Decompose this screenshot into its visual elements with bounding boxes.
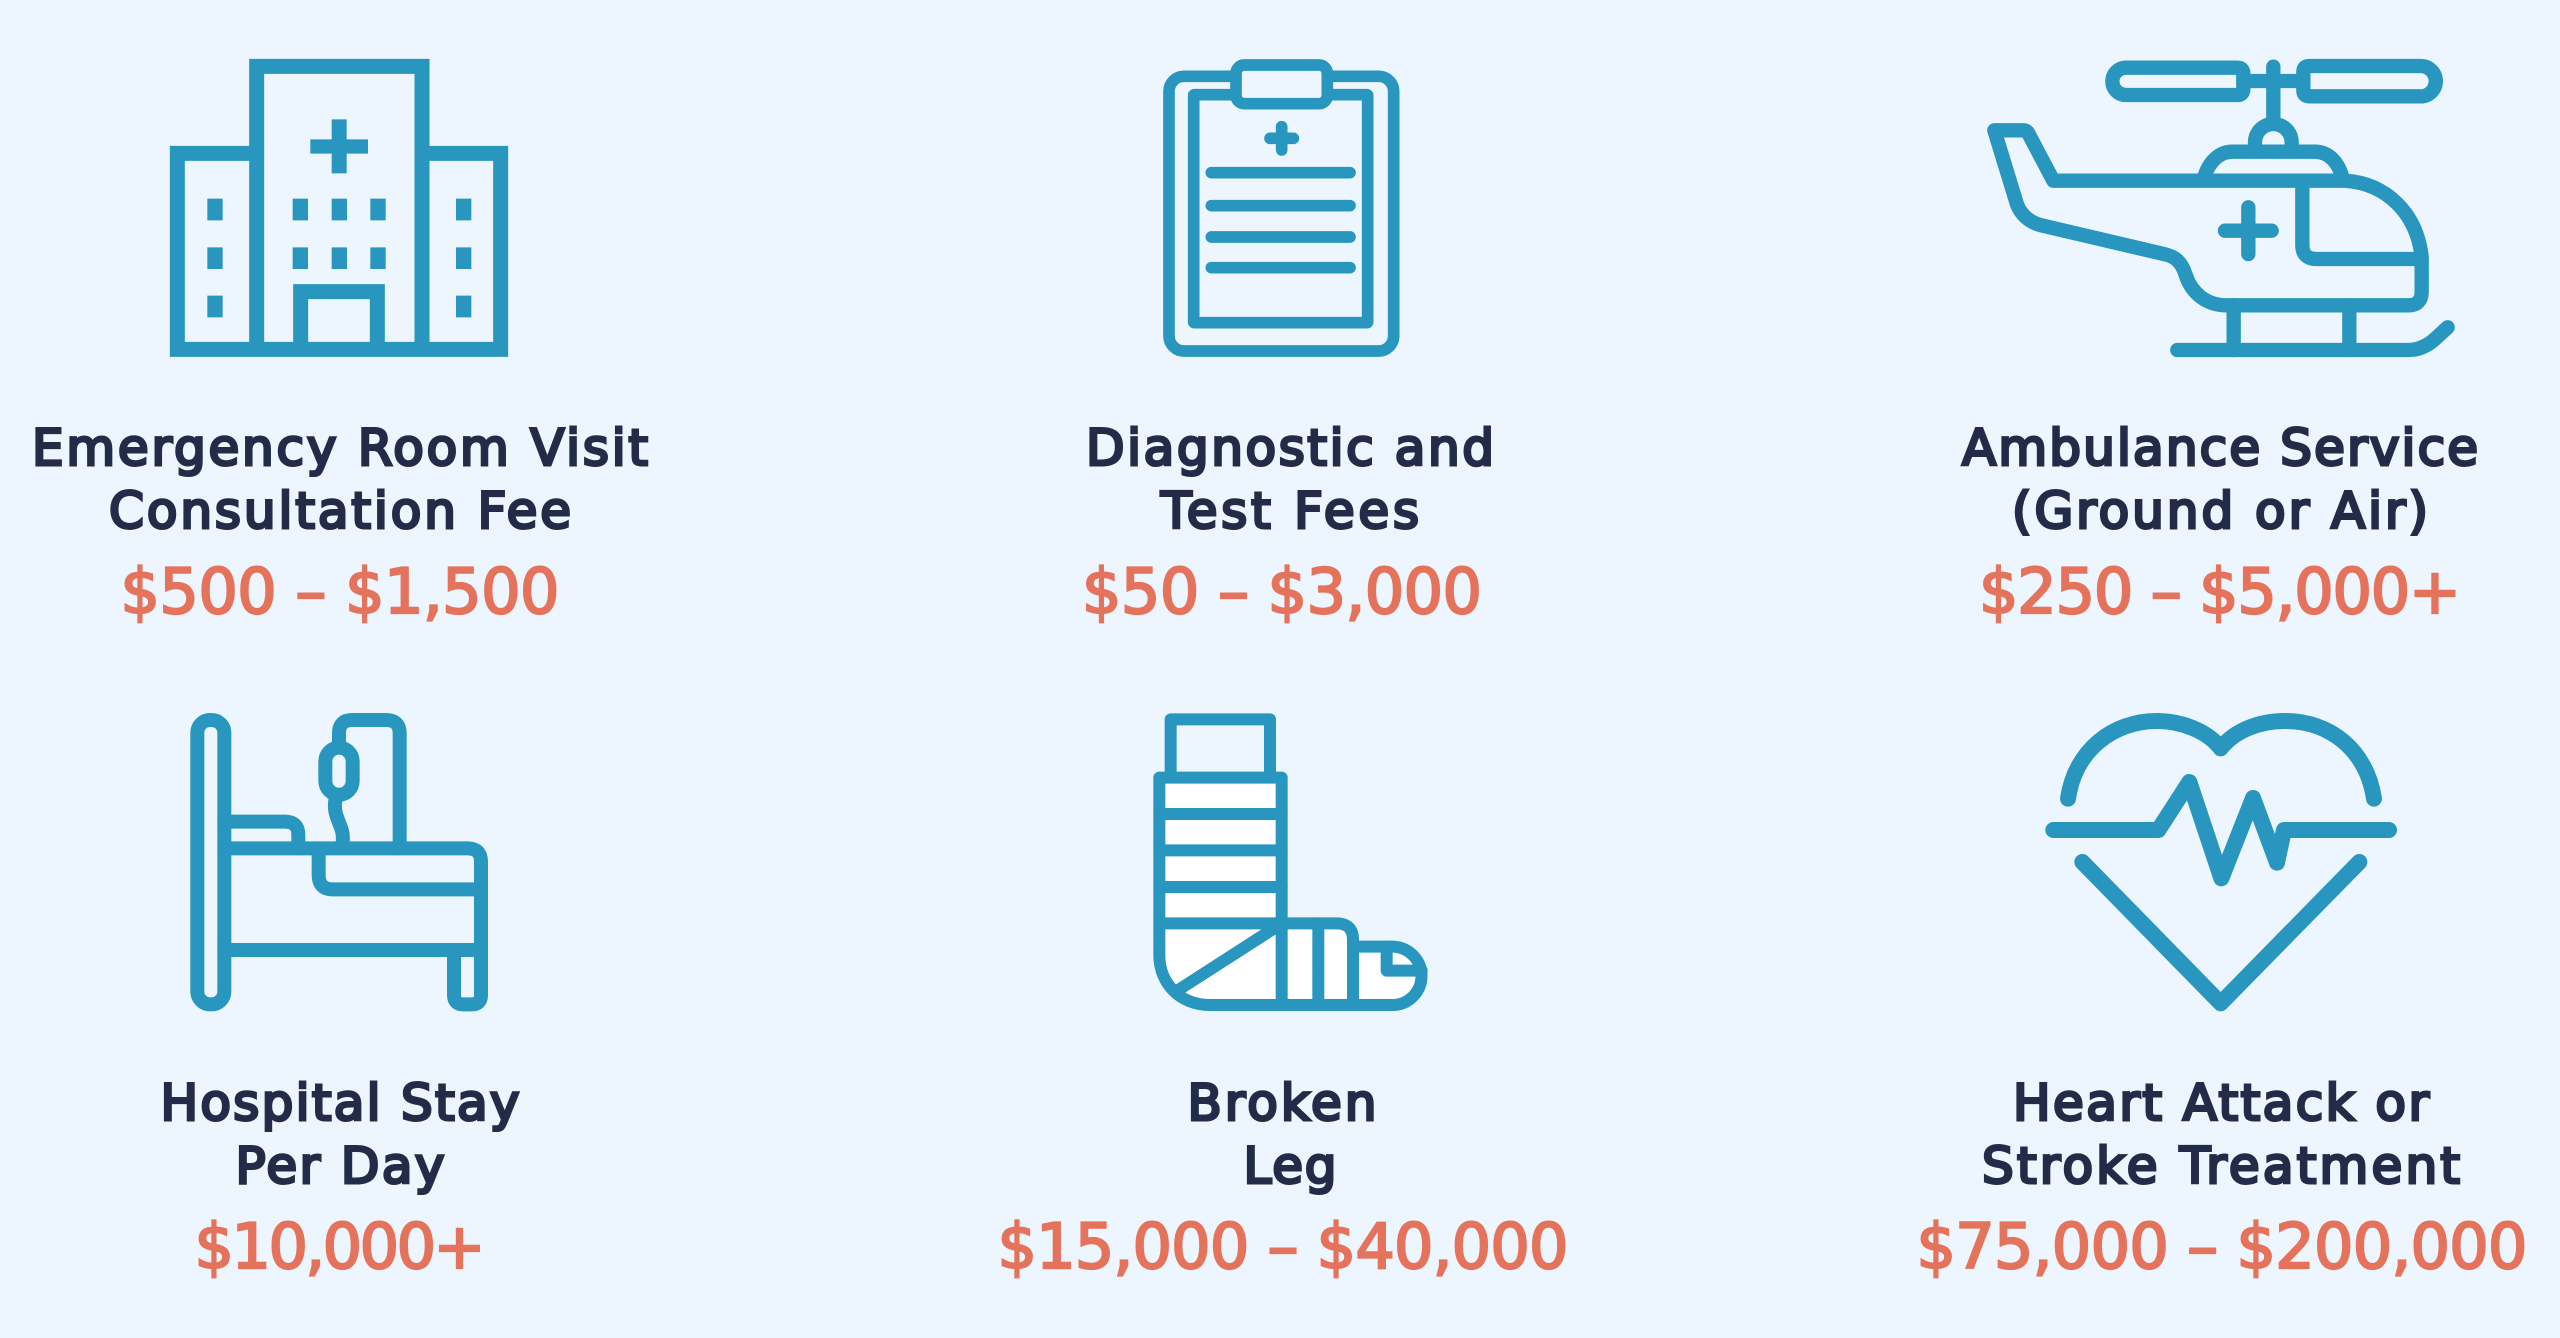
icon: leg cast bbox=[1159, 719, 1422, 1005]
panel: hospital stay bbox=[160, 720, 520, 1283]
panel: broken leg bbox=[998, 719, 1568, 1283]
heading: heart attack or stroke treatment: Stroke Treatment bbox=[1982, 1137, 2460, 1195]
icon: hospital bed with IV bbox=[197, 720, 481, 1004]
heading: hospital stay bbox=[160, 1074, 520, 1195]
heading: hospital stay: Per Day bbox=[236, 1137, 444, 1195]
icon: heart with pulse line bbox=[2053, 721, 2389, 1003]
icon: helicopter bbox=[1994, 66, 2448, 350]
heading: emergency room visit bbox=[32, 419, 648, 540]
heading: ambulance service bbox=[1962, 419, 2478, 540]
heading: ambulance service: Ambulance Service bbox=[1962, 419, 2478, 477]
heading: emergency room visit: Emergency Room Visit bbox=[32, 419, 648, 477]
heading: emergency room visit: Consultation Fee bbox=[109, 482, 571, 540]
price: broken leg: $15,000 – $40,000 bbox=[998, 1210, 1568, 1283]
panel: heart attack or stroke treatment bbox=[1916, 721, 2528, 1283]
heading: heart attack or stroke treatment bbox=[1982, 1074, 2460, 1195]
heading: diagnostic and test fees: Diagnostic and bbox=[1086, 419, 1494, 477]
panel: diagnostic and test fees bbox=[1082, 65, 1494, 628]
heading: broken leg: Broken bbox=[1188, 1074, 1376, 1132]
heading: ambulance service: (Ground or Air) bbox=[2012, 482, 2428, 540]
icon: clipboard bbox=[1169, 65, 1394, 351]
icon: hospital building bbox=[177, 66, 501, 349]
heading: heart attack or stroke treatment: Heart Attack or bbox=[2013, 1074, 2429, 1132]
price: ambulance service: $250 – $5,000+ bbox=[1979, 555, 2461, 628]
heading: broken leg bbox=[1188, 1074, 1376, 1195]
price: hospital stay: $10,000+ bbox=[194, 1210, 486, 1283]
panel: emergency room visit bbox=[32, 66, 648, 628]
panel: ambulance service bbox=[1962, 66, 2478, 628]
heading: hospital stay: Hospital Stay bbox=[160, 1074, 520, 1132]
price: heart attack or stroke treatment: $75,000 – $200,000 bbox=[1916, 1210, 2528, 1283]
heading: diagnostic and test fees: Test Fees bbox=[1160, 482, 1419, 540]
price: emergency room visit: $500 – $1,500 bbox=[120, 555, 560, 628]
heading: broken leg: Leg bbox=[1244, 1137, 1336, 1195]
price: diagnostic and test fees: $50 – $3,000 bbox=[1082, 555, 1482, 628]
heading: diagnostic and test fees bbox=[1086, 419, 1494, 540]
